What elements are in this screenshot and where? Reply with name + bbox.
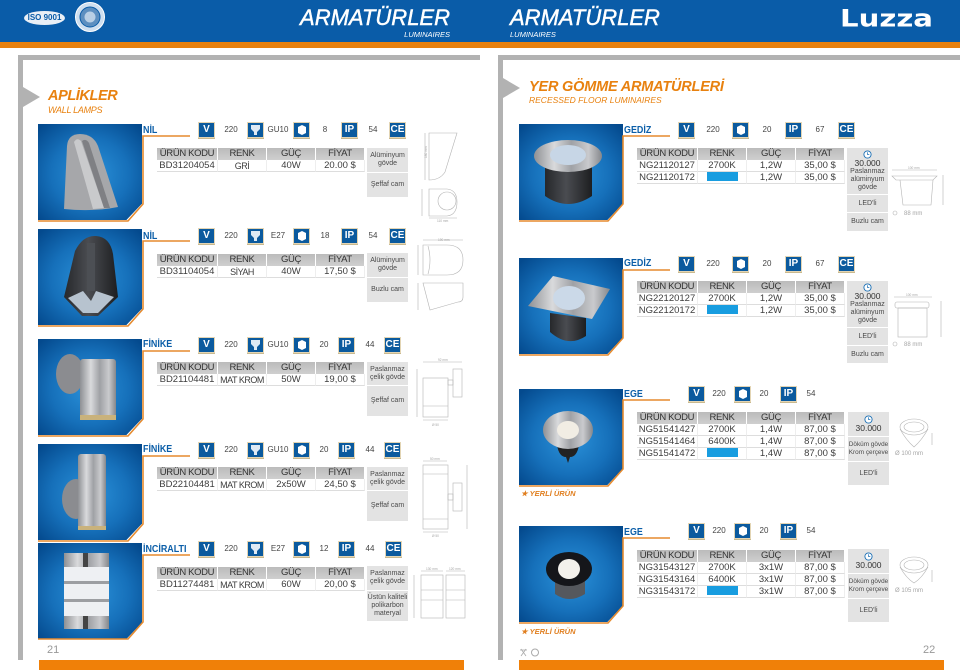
- material notes: alüminyum: [851, 176, 884, 183]
- spec table: RENK: [230, 362, 254, 373]
- spec table: 1,2W: [760, 160, 782, 171]
- panel: GEDİZ 2: IP: [789, 258, 798, 269]
- drawing: FİNİKE 2: [423, 457, 467, 538]
- spec table: 2x50W: [276, 479, 306, 490]
- spec table: [157, 254, 365, 278]
- panel: FİNİKE 1: GU10: [268, 340, 288, 349]
- panel: FİNİKE 2: IP: [342, 444, 351, 455]
- panel: GEDİZ 1: 220: [706, 125, 720, 134]
- product name: GEDİZ: [624, 257, 651, 269]
- spec table: BD31104054: [160, 266, 214, 277]
- panel: FİNİKE 1: 44: [366, 340, 374, 349]
- drawing: GEDİZ 1: 100 mm: [908, 166, 920, 170]
- panel: EGE 1: IP: [784, 388, 793, 399]
- material notes: Döküm gövde: [849, 441, 888, 448]
- section title: APLİKLER: [48, 88, 118, 115]
- panel: EGE 1: 220: [712, 389, 726, 398]
- spec table: 3x1W: [759, 586, 783, 597]
- material notes: [367, 362, 408, 416]
- spec table: [157, 148, 365, 172]
- material notes: Paslanmaz: [370, 366, 405, 372]
- panel: GEDİZ 2: 20: [763, 259, 771, 268]
- spec table: 87,00 $: [804, 586, 836, 597]
- spec table: FİYAT: [328, 362, 352, 373]
- material notes: çelik gövde: [370, 478, 405, 486]
- spec table: RENK: [710, 550, 734, 561]
- subheading left: LUMINAIRES: [404, 30, 450, 39]
- panel: GEDİZ 2: CE: [840, 258, 853, 269]
- material notes: [847, 148, 888, 231]
- spec icons: V: [203, 543, 210, 554]
- badge: YERLİ ÜRÜN 1: ★ YERLİ ÜRÜN: [521, 489, 576, 498]
- panel: NİL 1: 54: [369, 125, 377, 134]
- drawing: İNCİRALTI: 120 mm: [449, 567, 461, 571]
- panel: EGE 1: 20: [760, 389, 768, 398]
- spec table: GÜÇ: [281, 567, 301, 578]
- panel: FİNİKE 2: 20: [320, 445, 328, 454]
- spec table: NG51541427: [639, 424, 695, 435]
- spec table: BD31204054: [159, 160, 215, 171]
- spec table: 2700K: [708, 160, 736, 171]
- material notes: Buzlu cam: [851, 350, 884, 358]
- spec table: GÜÇ: [281, 254, 301, 265]
- spec icons: [688, 523, 705, 539]
- spec table: GÜÇ: [281, 362, 301, 373]
- material notes: [847, 281, 888, 363]
- drawing: FİNİKE 1: 92 mm: [438, 358, 448, 362]
- spec table: 87,00 $: [804, 574, 836, 585]
- drawing: FİNİKE 2: Ø 50: [432, 534, 439, 538]
- spec table: RENK: [710, 148, 734, 159]
- spec icons: [198, 122, 215, 138]
- panel: GEDİZ 1: IP: [789, 124, 798, 135]
- panel: EGE 2: [519, 523, 889, 624]
- drawing: EGE 1: Ø 100 mm: [895, 451, 923, 457]
- spec table: NG21120127: [639, 160, 695, 171]
- footer bar left: [39, 660, 464, 670]
- panel: EGE 2: IP: [784, 525, 793, 536]
- material notes: çelik gövde: [370, 578, 405, 585]
- panel: NİL 1: IP: [345, 124, 354, 135]
- section title: YER GÖMME: [529, 78, 724, 105]
- panel: NİL 2: CE: [391, 230, 404, 241]
- drawing: GEDİZ 2: 88 mm: [904, 342, 922, 348]
- subheading right: LUMINAIRES: [510, 30, 556, 39]
- photo: round recessed light: [519, 124, 623, 220]
- spec table: RENK: [230, 567, 254, 578]
- panel: NİL 2: E27: [271, 231, 285, 240]
- panel: İNCİRALTI: 44: [366, 544, 374, 553]
- material notes: 30.000: [854, 158, 880, 168]
- spec table: 3x1W: [759, 562, 783, 573]
- material notes: [367, 148, 408, 197]
- material notes: [848, 549, 889, 622]
- spec icons: V: [203, 124, 210, 135]
- panel: FİNİKE 1: 220: [224, 340, 238, 349]
- footer bar right: [519, 660, 944, 670]
- material notes: materyal: [374, 610, 401, 617]
- page number 22: 22: [923, 644, 935, 656]
- material notes: Paslanmaz: [850, 301, 885, 308]
- spec table: 1,2W: [760, 305, 782, 316]
- spec table: 2700K: [708, 424, 736, 435]
- drawing: EGE 2: Ø 105 mm: [895, 588, 923, 594]
- panel: İNCİRALTI: E27: [271, 544, 285, 553]
- panel: NİL 2: 18: [321, 231, 329, 240]
- photo: black ring recessed light: [519, 526, 623, 622]
- spec table: 1,4W: [760, 424, 782, 435]
- material notes: Krom çerçeve: [849, 586, 888, 593]
- panel: FİNİKE 1: [38, 337, 408, 437]
- material notes: Alüminyum: [370, 152, 405, 159]
- page number 21: 21: [47, 644, 59, 656]
- product name: FİNİKE: [143, 443, 172, 455]
- spec table: FİYAT: [808, 550, 832, 561]
- product name: EGE: [624, 388, 643, 400]
- spec table: 87,00 $: [804, 448, 836, 459]
- spec table: FİYAT: [328, 467, 352, 478]
- spec table: GÜÇ: [761, 281, 781, 292]
- panel: GEDİZ 2: 220: [706, 259, 720, 268]
- spec table: NG22120172: [639, 305, 695, 316]
- drawing: FİNİKE 2: 50 mm: [430, 457, 440, 461]
- spec table: GÜÇ: [761, 550, 781, 561]
- spec table: RENK: [710, 412, 734, 423]
- drawing: İNCİRALTI: 130 mm: [426, 567, 438, 571]
- spec table: [637, 550, 845, 598]
- spec table: 1,4W: [760, 436, 782, 447]
- product name: NİL: [143, 230, 157, 242]
- header band: [0, 0, 960, 48]
- drawing: NİL 2: 190 mm: [438, 238, 450, 242]
- ISO logo: [24, 11, 65, 25]
- panel: NİL 1: CE: [391, 124, 404, 135]
- panel: EGE 1: [519, 386, 889, 487]
- panel: NİL 1: [38, 122, 408, 222]
- spec table: 60W: [281, 579, 301, 590]
- drawing: FİNİKE 1: Ø 50: [432, 423, 439, 427]
- spec table: ÜRÜN KODU: [160, 467, 214, 478]
- spec table: RENK: [230, 254, 254, 265]
- spec table: GÜÇ: [281, 148, 301, 159]
- spec icons: [198, 541, 215, 557]
- spec table: MAT KROM: [220, 480, 264, 490]
- panel: FİNİKE 1: 20: [320, 340, 328, 349]
- drawing: NİL 2: [418, 238, 463, 310]
- spec table: 1,2W: [760, 172, 782, 183]
- spec table: ÜRÜN KODU: [160, 254, 214, 265]
- spec icons: V: [683, 124, 690, 135]
- material notes: Paslanmaz: [370, 570, 405, 577]
- panel: NİL 1: 8: [323, 125, 327, 134]
- photo: banded cylinder lamp: [38, 543, 142, 638]
- material notes: [848, 412, 889, 485]
- spec table: BD11274481: [160, 579, 214, 590]
- material notes: Şeffaf cam: [371, 181, 404, 188]
- spec icons: V: [203, 339, 210, 350]
- drawing: İNCİRALTI: [414, 567, 465, 618]
- material notes: çelik gövde: [370, 374, 405, 380]
- spec icons: V: [203, 230, 210, 241]
- panel: FİNİKE 2: [38, 442, 408, 542]
- spec table: 19,00 $: [324, 374, 356, 385]
- spec table: RENK: [710, 281, 734, 292]
- spec table: NG31543127: [639, 562, 695, 573]
- spec icons: V: [693, 388, 700, 399]
- material notes: gövde: [378, 265, 397, 272]
- spec table: FİYAT: [328, 567, 352, 578]
- spec icons: [198, 337, 215, 353]
- material notes: alüminyum: [851, 309, 884, 316]
- spec table: FİYAT: [808, 148, 832, 159]
- product name: FİNİKE: [143, 338, 172, 350]
- spec table: GÜÇ: [761, 148, 781, 159]
- spec table: ÜRÜN KODU: [640, 148, 694, 159]
- ISO logo: ISO 9001: [28, 13, 61, 22]
- drawing: NİL 1: [422, 133, 457, 223]
- material notes: [367, 467, 408, 521]
- material notes: LED'li: [858, 200, 877, 206]
- spec table: 35,00 $: [804, 293, 836, 304]
- drawing: NİL 1: 110 mm: [437, 219, 449, 223]
- spec table: [637, 148, 845, 184]
- panel: İNCİRALTI: 220: [224, 544, 238, 553]
- drawing: GEDİZ 2: [893, 293, 941, 348]
- spec table: FİYAT: [328, 148, 352, 159]
- spec table: BD21104481: [160, 374, 214, 385]
- material notes: Buzlu cam: [851, 218, 884, 225]
- spec icons: [198, 442, 215, 458]
- panel: EGE 2: 54: [807, 526, 815, 535]
- drawing: GEDİZ 1: [892, 166, 943, 217]
- spec table: 1,4W: [760, 448, 782, 459]
- product name: İNCİRALTI: [143, 543, 186, 555]
- spec table: 87,00 $: [804, 424, 836, 435]
- spec table: NG21120172: [639, 172, 695, 183]
- spec table: [157, 467, 365, 491]
- material notes: Paslanmaz: [850, 168, 885, 175]
- material notes: gövde: [858, 184, 877, 191]
- material notes: Krom çerçeve: [849, 449, 888, 456]
- spec table: NG31543172: [639, 586, 695, 597]
- spec icons: V: [693, 525, 700, 536]
- drawing: EGE 1: [895, 419, 932, 457]
- photo: silver wall lamp: [38, 124, 142, 220]
- spec table: 50W: [281, 374, 301, 385]
- panel: EGE 2: 20: [760, 526, 768, 535]
- spec table: [637, 412, 845, 460]
- material notes: gövde: [858, 317, 877, 324]
- spec table: ÜRÜN KODU: [160, 567, 214, 578]
- section title: APLİKLER: WALL LAMPS: [48, 105, 102, 115]
- material notes: [367, 566, 408, 621]
- spec table: NG51541464: [639, 436, 695, 447]
- material notes: 30.000: [856, 423, 882, 433]
- spec icons: [678, 256, 695, 272]
- photo: black wall lamp: [38, 229, 142, 325]
- section title: YER GÖMME: RECESSED FLOOR LUMINAIRES: [529, 95, 662, 105]
- spec icons: V: [683, 258, 690, 269]
- drawing: FİNİKE 1: [417, 358, 462, 427]
- material notes: Alüminyum: [370, 257, 405, 264]
- panel: FİNİKE 2: 44: [366, 445, 374, 454]
- spec icons: [688, 386, 705, 402]
- spec icons: [678, 122, 695, 138]
- panel: NİL 2: [38, 228, 408, 327]
- panel: GEDİZ 2: 67: [816, 259, 824, 268]
- photo: double steel cylinder lamp: [38, 444, 142, 540]
- drawing: GEDİZ 1: 88 mm: [904, 211, 922, 217]
- spec table: ÜRÜN KODU: [160, 148, 214, 159]
- section title: APLİKLER: APLİKLER: [48, 88, 117, 104]
- spec table: NG51541472: [639, 448, 695, 459]
- photo: steel cylinder lamp: [38, 339, 142, 435]
- panel: NİL 2: 54: [369, 231, 377, 240]
- Luzza logo: Luzza: [840, 4, 933, 32]
- heading left: ARMATÜRLER: [300, 5, 450, 30]
- material notes: LED'li: [859, 470, 878, 476]
- spec table: NG22120127: [639, 293, 695, 304]
- spec table: 40W: [281, 160, 301, 171]
- panel: İNCİRALTI: [38, 541, 408, 640]
- spec table: BD22104481: [159, 479, 215, 490]
- spec table: 20.00 $: [324, 160, 356, 171]
- material notes: 30.000: [856, 560, 882, 570]
- spec table: ÜRÜN KODU: [160, 362, 214, 373]
- panel: NİL 2: IP: [345, 230, 354, 241]
- spec table: SİYAH: [230, 267, 254, 277]
- panel: NİL 2: 220: [224, 231, 238, 240]
- spec table: [157, 362, 365, 386]
- round quality seal: [75, 2, 105, 32]
- spec table: [637, 281, 845, 317]
- panel: GEDİZ 1: 67: [816, 125, 824, 134]
- panel: NİL 1: 220: [224, 125, 238, 134]
- spec table: 2700K: [708, 293, 736, 304]
- material notes: Şeffaf cam: [371, 502, 404, 509]
- material notes: gövde: [378, 160, 397, 167]
- material notes: polikarbon: [371, 602, 404, 609]
- heading right: ARMATÜRLER: [510, 5, 660, 30]
- photo: round spike light: [519, 389, 623, 485]
- product name: EGE: [624, 526, 643, 538]
- spec table: 35,00 $: [804, 305, 836, 316]
- spec table: ÜRÜN KODU: [640, 281, 694, 292]
- panel: GEDİZ 2: [519, 256, 888, 363]
- spec table: 20,00 $: [324, 579, 356, 590]
- material notes: Şeffaf cam: [371, 397, 404, 404]
- panel: EGE 1: 54: [807, 389, 815, 398]
- panel: İNCİRALTI: CE: [387, 543, 400, 554]
- material notes: Üstün kaliteli: [368, 594, 407, 601]
- material notes: [367, 253, 408, 302]
- panel: GEDİZ 1: CE: [840, 124, 853, 135]
- material notes: LED'li: [859, 606, 878, 614]
- spec table: MAT KROM: [220, 375, 264, 385]
- material notes: Buzlu cam: [371, 286, 404, 293]
- panel: İNCİRALTI: 12: [320, 544, 328, 553]
- spec table: 35,00 $: [804, 172, 836, 183]
- drawing: NİL 1: 180 mm: [424, 146, 428, 158]
- spec table: 6400K: [708, 436, 736, 447]
- product name: GEDİZ: [624, 124, 651, 136]
- spec table: GRİ: [235, 161, 249, 171]
- panel: İNCİRALTI: IP: [342, 543, 351, 554]
- spec table: 6400K: [708, 574, 736, 585]
- badge: YERLİ ÜRÜN 2: ★ YERLİ ÜRÜN: [521, 627, 576, 636]
- material notes: 30.000: [854, 291, 880, 301]
- drawing: GEDİZ 2: 100 mm: [906, 293, 918, 297]
- panel: FİNİKE 1: IP: [342, 339, 351, 350]
- spec table: 87,00 $: [804, 562, 836, 573]
- panel: EGE 2: 220: [712, 526, 726, 535]
- spec table: 17,50 $: [324, 266, 356, 277]
- spec table: 1,2W: [760, 293, 782, 304]
- panel: GEDİZ 1: [519, 122, 888, 231]
- spec table: 2700K: [708, 562, 736, 573]
- material notes: Döküm gövde: [849, 578, 888, 585]
- spec icons: [198, 228, 215, 244]
- spec table: ÜRÜN KODU: [640, 550, 694, 561]
- spec table: NG31543164: [639, 574, 695, 585]
- spec table: FİYAT: [808, 412, 832, 423]
- panel: FİNİKE 2: GU10: [268, 445, 288, 454]
- spec icons: V: [203, 444, 210, 455]
- panel: FİNİKE 1: CE: [386, 339, 399, 350]
- panel: FİNİKE 2: 220: [224, 445, 238, 454]
- icons: recycling marks: [520, 648, 539, 656]
- panel: FİNİKE 2: CE: [386, 444, 399, 455]
- spec table: FİYAT: [328, 254, 352, 265]
- panel: GEDİZ 1: 20: [763, 125, 771, 134]
- spec table: GÜÇ: [281, 467, 301, 478]
- spec table: 24,50 $: [324, 479, 356, 490]
- spec table: GÜÇ: [761, 412, 781, 423]
- spec table: RENK: [230, 148, 254, 159]
- spec table: 87,00 $: [804, 436, 836, 447]
- material notes: LED'li: [858, 332, 877, 340]
- spec table: 3x1W: [759, 574, 783, 585]
- drawing: EGE 2: [895, 557, 932, 594]
- material notes: Paslanmaz: [370, 470, 405, 478]
- spec table: 40W: [281, 266, 301, 277]
- spec table: 35,00 $: [804, 160, 836, 171]
- spec table: ÜRÜN KODU: [640, 412, 694, 423]
- spec table: RENK: [230, 467, 254, 478]
- section title: YER GÖMME: YER GÖMME ARMATÜRLERİ: [529, 79, 724, 95]
- product name: NİL: [143, 124, 157, 136]
- spec table: [157, 567, 365, 591]
- photo: square recessed light: [519, 258, 623, 354]
- spec table: FİYAT: [808, 281, 832, 292]
- panel: NİL 1: GU10: [268, 125, 288, 134]
- spec table: MAT KROM: [220, 580, 264, 590]
